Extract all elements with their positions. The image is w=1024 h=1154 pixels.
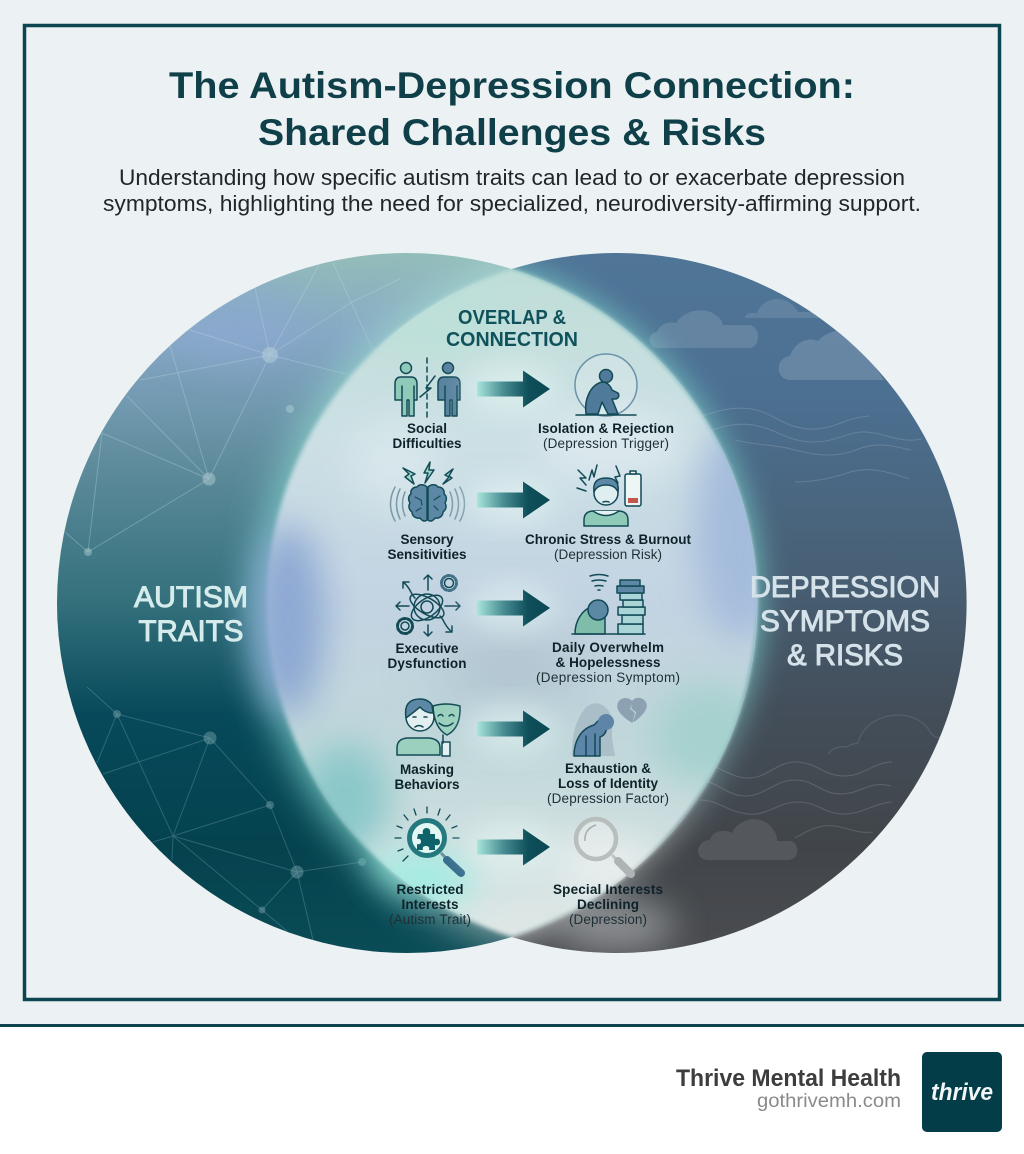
network pattern: lower xyxy=(87,687,366,940)
row: sensory sensitivities xyxy=(388,462,692,562)
label: social difficulties: Social xyxy=(407,421,447,436)
subtitle: Understanding how specific autism traits can lead to or exacerbate depression xyxy=(119,165,905,190)
label: restricted interests: (Autism Trait) xyxy=(389,912,471,927)
footer brand text xyxy=(676,1065,901,1112)
label: exhaustion and loss of identity: Loss of Identity xyxy=(558,776,658,791)
heading: overlap and connection xyxy=(446,307,578,351)
overlap lens xyxy=(252,269,785,949)
label: restricted interests: Interests xyxy=(402,897,458,912)
row: restricted interests xyxy=(389,807,663,927)
label: daily overwhelm and hopelessness: Daily Overwhelm xyxy=(552,640,664,655)
subtitle: symptoms, highlighting the need for specialized, neurodiversity-affirming support. xyxy=(103,191,921,216)
label: exhaustion and loss of identity xyxy=(547,761,669,806)
label: chronic stress and burnout: Chronic Stress & Burnout xyxy=(525,532,692,547)
row: social difficulties xyxy=(392,354,674,451)
label: social difficulties xyxy=(392,421,462,451)
footer band xyxy=(0,1024,1024,1154)
waves xyxy=(692,408,922,838)
label: daily overwhelm and hopelessness xyxy=(536,640,680,685)
icon: faded magnifier xyxy=(576,819,631,874)
label: depression symptoms and risks: SYMPTOMS xyxy=(760,605,930,638)
label: chronic stress and burnout: (Depression Risk) xyxy=(554,547,662,562)
label: sensory sensitivities: Sensory xyxy=(400,532,454,547)
label: restricted interests xyxy=(389,882,471,927)
label: autism traits: TRAITS xyxy=(138,615,244,648)
arrow xyxy=(466,703,558,755)
label: autism traits xyxy=(134,581,248,648)
arrow xyxy=(466,821,558,873)
label: depression symptoms and risks: & RISKS xyxy=(787,639,903,672)
icon: two separated figures xyxy=(395,358,460,417)
icon: tangled thoughts with arrows and gears xyxy=(396,575,460,636)
arrow xyxy=(466,474,558,526)
icon: overwhelmed person with book stack xyxy=(572,574,645,634)
label: restricted interests: Restricted xyxy=(396,882,464,897)
label: sensory sensitivities xyxy=(388,532,466,562)
title xyxy=(169,65,855,153)
arrow xyxy=(466,582,558,634)
label: special interests declining xyxy=(553,882,663,927)
label: special interests declining: Special Interests xyxy=(553,882,663,897)
footer brand text: Thrive Mental Health xyxy=(676,1065,901,1092)
icon: exhausted figure and broken heart xyxy=(572,699,646,756)
label: executive dysfunction: Dysfunction xyxy=(388,656,466,671)
label: exhaustion and loss of identity: Exhaustion & xyxy=(565,761,651,776)
heading: overlap and connection: OVERLAP & xyxy=(458,307,566,329)
footer divider xyxy=(0,1024,1024,1027)
label: special interests declining: Declining xyxy=(577,897,639,912)
heading: overlap and connection: CONNECTION xyxy=(446,329,578,351)
label: sensory sensitivities: Sensitivities xyxy=(388,547,466,562)
icon: person holding smiling mask xyxy=(397,699,460,756)
label: depression symptoms and risks xyxy=(750,571,940,672)
subtitle xyxy=(103,165,921,216)
overlap glow xyxy=(267,269,757,949)
circle: autism traits xyxy=(57,253,757,953)
clouds xyxy=(649,299,943,860)
icon: brain with sensory bolts xyxy=(390,462,464,521)
label: executive dysfunction xyxy=(388,641,466,671)
label: isolation and rejection: (Depression Trigger) xyxy=(543,436,669,451)
footer brand text: gothrivemh.com xyxy=(757,1091,901,1112)
label: social difficulties: Difficulties xyxy=(392,436,462,451)
icon: stressed person with low battery xyxy=(577,465,641,526)
label: daily overwhelm and hopelessness: & Hopelessness xyxy=(556,655,660,670)
label: chronic stress and burnout xyxy=(525,532,692,562)
arrow xyxy=(466,363,558,415)
label: special interests declining: (Depression) xyxy=(569,912,647,927)
icon: figure isolated in a bubble xyxy=(575,354,637,416)
label: autism traits: AUTISM xyxy=(134,581,248,614)
network pattern: upper xyxy=(65,263,400,556)
label: executive dysfunction: Executive xyxy=(396,641,459,656)
circle: depression symptoms xyxy=(267,253,967,953)
label: isolation and rejection: Isolation & Rejection xyxy=(538,421,674,436)
title: The Autism-Depression Connection: xyxy=(169,65,855,106)
label: depression symptoms and risks: DEPRESSION xyxy=(750,571,940,604)
row: masking behaviors xyxy=(394,699,669,806)
label: isolation and rejection xyxy=(538,421,674,451)
row: executive dysfunction xyxy=(388,574,680,685)
label: exhaustion and loss of identity: (Depression Factor) xyxy=(547,791,669,806)
label: masking behaviors: Behaviors xyxy=(394,777,460,792)
title: Shared Challenges & Risks xyxy=(258,112,766,153)
icon: magnifier over puzzle piece xyxy=(395,807,461,873)
logo: thrive xyxy=(931,1079,993,1106)
panel: venn diagram xyxy=(57,253,967,953)
label: daily overwhelm and hopelessness: (Depression Symptom) xyxy=(536,670,680,685)
label: masking behaviors xyxy=(394,762,460,792)
label: masking behaviors: Masking xyxy=(400,762,454,777)
logo xyxy=(922,1052,1002,1132)
